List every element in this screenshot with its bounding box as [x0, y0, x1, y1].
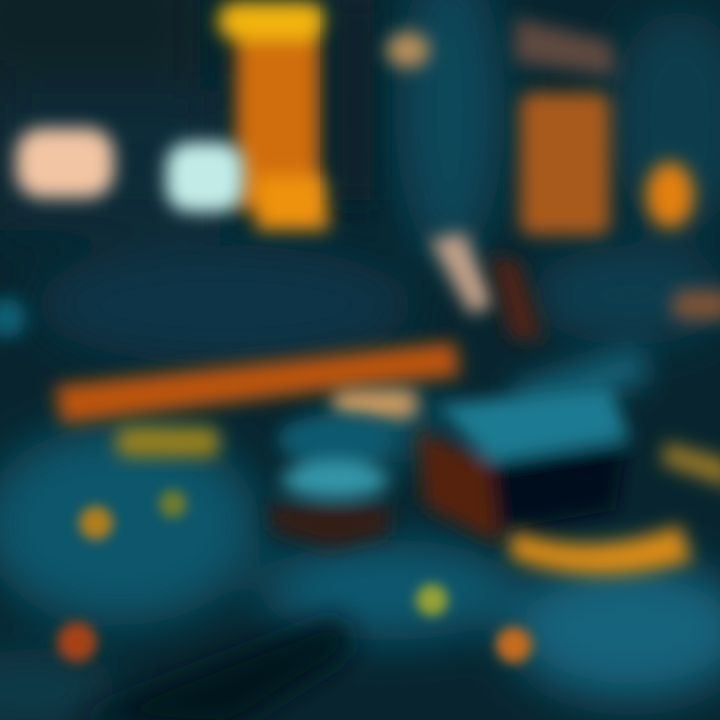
dark column beside orange column	[338, 0, 374, 200]
pale cyan light	[166, 142, 244, 212]
yellow dot	[79, 506, 113, 540]
dark diagonal stripe	[70, 615, 355, 720]
orange window panel	[520, 93, 610, 235]
red orange dot	[57, 622, 97, 662]
brown upper window	[515, 18, 616, 76]
yellow strip	[116, 427, 220, 457]
teal glow near right	[510, 345, 650, 405]
white peach light	[16, 128, 114, 198]
small peach light	[386, 32, 430, 68]
brown right light	[672, 290, 720, 320]
orange curved strip	[510, 525, 692, 575]
orange dot	[496, 627, 532, 663]
peach diagonal shape	[430, 232, 494, 314]
icon: teal cup	[268, 414, 393, 548]
yellow green dot	[416, 584, 448, 616]
cream strip	[333, 390, 417, 418]
olive dot	[159, 490, 187, 518]
orange right light	[646, 162, 694, 228]
dots	[57, 490, 532, 663]
panel: orange column	[218, 2, 328, 230]
gold right strip	[662, 442, 720, 488]
icon: teal box with dark front	[418, 385, 630, 545]
orange band	[55, 342, 460, 424]
brown diagonal shape	[490, 255, 544, 340]
teal left edge glow	[0, 298, 26, 338]
